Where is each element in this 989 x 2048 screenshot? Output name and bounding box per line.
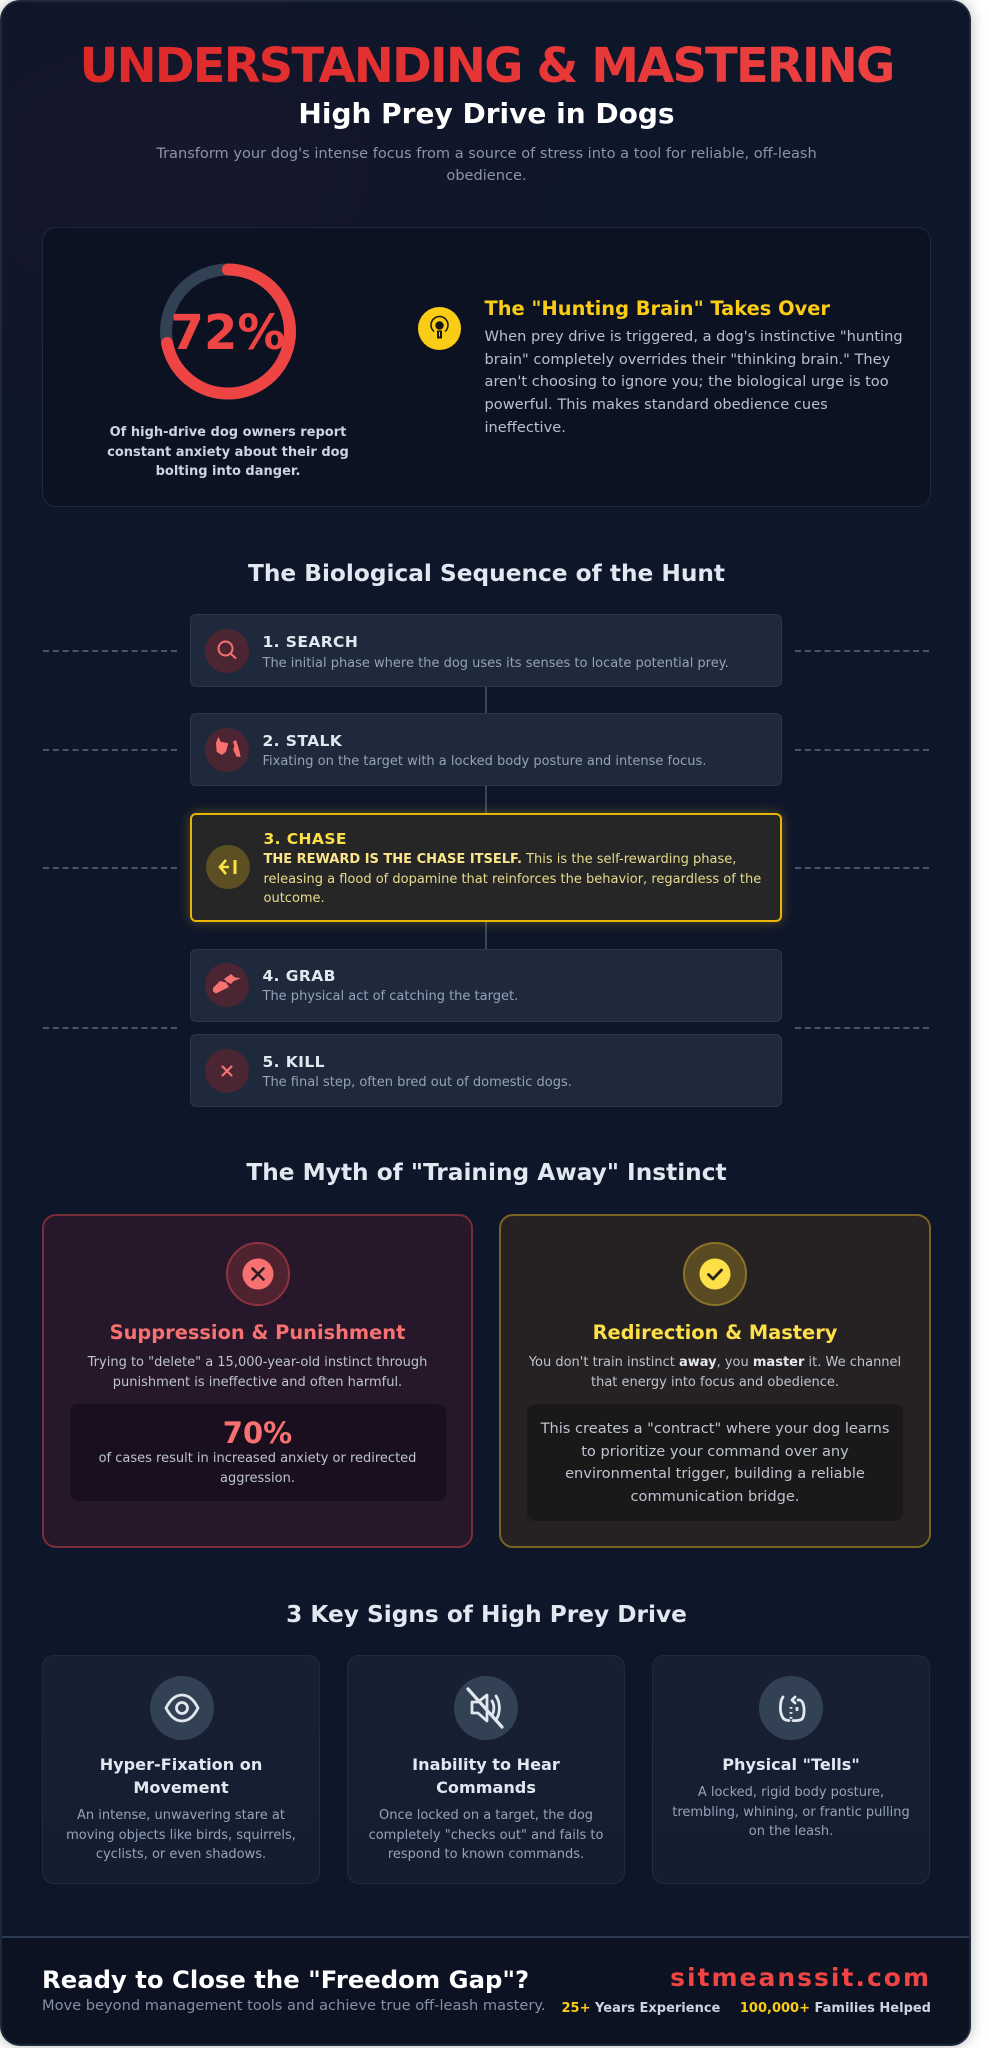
icon: check [683, 1242, 747, 1306]
sign 2 title: Inability to Hear [412, 1755, 560, 1774]
icon: search [205, 629, 249, 673]
contract text: environmental trigger, building a reliable [565, 1465, 865, 1482]
step 3 title: 3. CHASE [264, 830, 347, 848]
suppression text [88, 1355, 427, 1390]
hunting brain text: ineffective. [484, 419, 566, 436]
step 1 text: The initial phase where the dog uses its senses to locate potential prey. [262, 656, 729, 670]
stat caption: bolting into danger. [156, 464, 300, 479]
step 3 text: outcome. [264, 891, 325, 906]
intro text [156, 144, 817, 184]
suppression heading: Suppression & Punishment [110, 1321, 405, 1344]
step 2: stalk [190, 713, 782, 786]
sign 3 text [672, 1785, 910, 1839]
step 3: chase [190, 813, 782, 922]
stat box [70, 1404, 446, 1501]
sign 2 text: respond to known commands. [388, 1847, 584, 1862]
hunting brain heading: The "Hunting Brain" Takes Over [484, 297, 830, 320]
donut chart: 72% [160, 264, 296, 400]
step 4: grab [190, 949, 782, 1022]
step dashes and connectors [43, 650, 929, 1029]
icon: kill [205, 1049, 249, 1093]
contract text: to prioritize your command over any [581, 1443, 849, 1460]
icon: muted speaker [454, 1676, 518, 1740]
icon: chase [206, 845, 250, 889]
panel: redirection [499, 1214, 931, 1548]
heading: myth: The Myth of "Training Away" Instinct [246, 1159, 727, 1186]
footer heading: Ready to Close the "Freedom Gap"? [42, 1965, 529, 1994]
icon: cross [226, 1242, 290, 1306]
redirection heading: Redirection & Mastery [593, 1321, 837, 1344]
sign 1 title: Hyper-Fixation on [100, 1755, 262, 1774]
sign 3 title: Physical "Tells" [722, 1755, 860, 1774]
sign 1 text: moving objects like birds, squirrels, [66, 1828, 296, 1842]
icon: eye [150, 1676, 214, 1740]
suppression text: punishment is ineffective and often harmful. [113, 1374, 402, 1390]
hunting brain text: brain" completely overrides their "thinking brain." They [484, 351, 890, 368]
stat caption: Of high-drive dog owners report [110, 425, 346, 440]
sign 1 text: An intense, unwavering stare at [77, 1808, 285, 1823]
sign 1 title [100, 1755, 262, 1797]
sign 3 text: A locked, rigid body posture, [698, 1785, 884, 1800]
hunting brain text: When prey drive is triggered, a dog's instinctive "hunting [484, 328, 903, 345]
stat text [99, 1451, 416, 1486]
step 5 title: 5. KILL [262, 1053, 325, 1071]
hunting brain text: aren't choosing to ignore you; the biological urge is too [484, 373, 889, 390]
intro text: obedience. [446, 167, 527, 184]
heading: sequence: The Biological Sequence of the Hunt [248, 560, 725, 587]
panel: sign 1 [42, 1655, 320, 1884]
step 3 text: THE REWARD IS THE CHASE ITSELF. This is the self-rewarding phase, [264, 852, 736, 867]
icon: stalk [205, 728, 249, 772]
sign 1 title: Movement [133, 1778, 229, 1797]
step 2 title: 2. STALK [262, 732, 342, 750]
hunting brain text: powerful. This makes standard obedience cues [484, 396, 828, 413]
step 1 title: 1. SEARCH [262, 633, 358, 651]
redirection text [528, 1355, 901, 1390]
step 5 text: The final step, often bred out of domestic dogs. [262, 1075, 572, 1090]
subtitle: High Prey Drive in Dogs [298, 96, 675, 130]
contract box [527, 1404, 903, 1521]
footer subtext: Move beyond management tools and achieve true off-leash mastery. [42, 1997, 546, 2014]
step 5: kill [190, 1034, 782, 1107]
icon: body tells [759, 1676, 823, 1740]
sign 2 text: completely "checks out" and fails to [369, 1828, 603, 1842]
sign 1 text [66, 1808, 296, 1862]
redirection text: You don't train instinct away, you master it. We channel [529, 1355, 901, 1370]
step 1: search [190, 614, 782, 687]
stat caption [107, 425, 349, 479]
hunting brain text [484, 328, 903, 436]
redirection text: that energy into focus and obedience. [591, 1374, 839, 1390]
sign 2 title: Commands [436, 1778, 536, 1797]
icon: grab [205, 963, 249, 1007]
stat text: of cases result in increased anxiety or redirected [99, 1451, 416, 1466]
sign 3 text: trembling, whining, or frantic pulling [672, 1804, 910, 1820]
panel: sign 3 [652, 1655, 930, 1884]
stat caption: constant anxiety about their dog [107, 444, 349, 460]
intro text: Transform your dog's intense focus from a source of stress into a tool for reliable, off-leash [156, 144, 817, 162]
sign 2 title [412, 1755, 560, 1797]
70% stat: 70% [223, 1416, 292, 1450]
contract text [540, 1420, 889, 1505]
step 4 text: The physical act of catching the target. [262, 989, 518, 1004]
sign 2 text: Once locked on a target, the dog [379, 1808, 593, 1823]
sign 3 text: on the leash. [749, 1824, 833, 1839]
contract text: communication bridge. [631, 1488, 799, 1505]
sign 1 text: cyclists, or even shadows. [96, 1847, 266, 1862]
step 3 text [264, 852, 761, 906]
suppression text: Trying to "delete" a 15,000-year-old instinct through [88, 1355, 427, 1370]
step 2 text: Fixating on the target with a locked body posture and intense focus. [262, 754, 706, 769]
donut chart: 72%: 72% [171, 304, 285, 360]
footer stats: 25+ Years Experience 100,000+ Families Helped [562, 2001, 931, 2016]
title: UNDERSTANDING & MASTERING [79, 38, 894, 94]
sign 2 text [369, 1808, 603, 1862]
step 4 title: 4. GRAB [262, 967, 336, 985]
contract text: This creates a "contract" where your dog learns [541, 1420, 889, 1437]
stat text: aggression. [220, 1470, 295, 1486]
step 3 text: releasing a flood of dopamine that reinforces the behavior, regardless of the [264, 872, 761, 886]
website: sitmeanssit.com [670, 1963, 931, 1992]
panel: hunting brain stat [42, 227, 931, 507]
footer [2, 1936, 969, 2044]
panel: sign 2 [347, 1655, 625, 1884]
icon: brain [418, 307, 461, 350]
heading: signs: 3 Key Signs of High Prey Drive [286, 1601, 687, 1628]
panel: suppression [42, 1214, 473, 1548]
